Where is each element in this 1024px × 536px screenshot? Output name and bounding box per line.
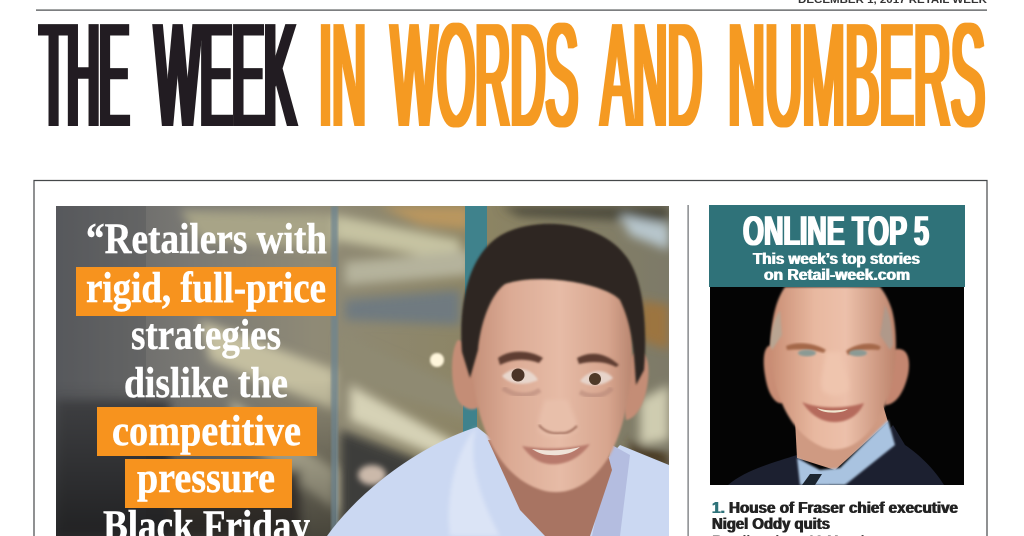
photo background (56, 206, 669, 536)
story 1 headline: Nigel Oddy quits (712, 516, 830, 533)
subheading line 2: on Retail-week.com (764, 267, 910, 284)
panel: online top 5 (709, 205, 965, 536)
story 1 headline: 1. (712, 500, 725, 517)
story 1 headline: House of Fraser chief executive (729, 500, 958, 517)
hair (461, 224, 645, 385)
quote line 1: “Retailers with (86, 216, 327, 263)
title (40, 0, 985, 158)
quote text (76, 216, 336, 536)
eyebrows (786, 343, 826, 353)
shirt (327, 427, 669, 536)
story 1 headline (712, 500, 958, 533)
ears (764, 345, 786, 403)
side hair (770, 310, 782, 350)
highlight: rigid, full-price (76, 267, 336, 316)
face (471, 276, 632, 492)
subheading line 1: This week’s top stories (753, 251, 920, 268)
highlight: competitive (97, 407, 317, 456)
quote line 5: competitive (112, 408, 301, 455)
teal header (709, 205, 965, 287)
head (771, 287, 896, 449)
panel: quote photo (56, 206, 669, 536)
mouth (802, 402, 864, 422)
quote line 3: strategies (131, 312, 281, 359)
quote line 2: rigid, full-price (86, 265, 326, 312)
quote line 6: pressure (137, 455, 275, 502)
eyebrows (498, 352, 543, 365)
panel frame (34, 180, 987, 536)
quote line 4: dislike the (124, 360, 288, 407)
suit (728, 425, 944, 485)
nose (540, 404, 576, 430)
eyes (798, 350, 816, 356)
neck (795, 406, 888, 470)
eyes (502, 369, 538, 384)
ears (452, 340, 480, 409)
portrait: Nigel Oddy (710, 287, 964, 485)
tie (802, 474, 822, 485)
divider (688, 205, 689, 536)
man portrait (327, 224, 669, 536)
neck (488, 440, 612, 536)
mouth (522, 444, 590, 464)
nose (823, 355, 832, 392)
highlight: pressure (125, 459, 292, 508)
collar (797, 420, 895, 485)
